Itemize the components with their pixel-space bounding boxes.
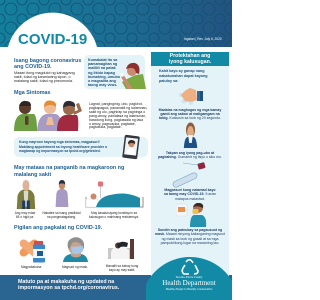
- symptoms text: pagtusuka, pagtatae.: [89, 125, 122, 129]
- intro text: nabakunahan dapat kayong: [159, 74, 208, 78]
- icon: person with mask: [63, 237, 88, 262]
- intro text: Maaari itong magdulot ng kahagyang: [14, 70, 75, 74]
- intro text: [159, 69, 208, 83]
- icon: pregnant woman: [56, 180, 68, 207]
- icon: coughing person: [120, 62, 146, 89]
- callout: contact provider: magbarap ng impormasyon sa tpchd.org/getested.: [19, 149, 101, 153]
- covering cough text: Takpan ang iyong pag-ubo at: [166, 151, 214, 155]
- icon: tablet with doctor: [122, 134, 140, 160]
- icon: person with mask and document: [176, 203, 206, 227]
- footer text: impormasyon sa tpchd.org/coronavirus.: [18, 285, 119, 291]
- intro heading: ang COVID-19.: [14, 64, 51, 70]
- symptoms text: [89, 102, 148, 129]
- panel heading: [151, 52, 229, 66]
- org name large: Health Department: [162, 278, 216, 286]
- label: 65 o higit pa.: [16, 215, 34, 219]
- intro text: sakit, tulad ng karaniwang sipon, o: [14, 75, 71, 79]
- icon: triangle logo: [182, 260, 198, 274]
- symptoms text: o amoy, pagsusuka, pagtatae,: [89, 122, 136, 126]
- symptoms text: pang-amoy, panlalasa ng lalamunan,: [89, 114, 146, 118]
- label: kayo ay may sakit.: [109, 268, 135, 272]
- label: [14, 211, 36, 219]
- hand washing text: [158, 108, 222, 120]
- covering cough text: [158, 151, 222, 159]
- footer text: [18, 278, 119, 291]
- risk group: pregnant: [42, 180, 81, 219]
- callout: cough: [84, 55, 145, 89]
- intro text: patuloy sa:: [159, 79, 178, 83]
- label: [89, 211, 139, 219]
- intro text: malalang sakit, tulad ng pneumonia.: [14, 79, 73, 83]
- isolation text: [155, 228, 225, 245]
- callout: cough: ng likido kapag: [88, 71, 115, 75]
- symptoms text: sakit ng ulo, paghirap sa paghinga o: [89, 110, 145, 114]
- high risk heading: [14, 165, 124, 178]
- callout: cough: Kumakalat ito sa: [88, 58, 117, 62]
- covering cough text: pagbahing. Gumamit ng tisyu o siko mo.: [158, 155, 222, 159]
- label: [106, 264, 138, 272]
- isolation text: mask. Maaari ninyong kailanganing magsuot: [155, 232, 225, 236]
- symptoms text: pagkapagod, pananakit ng kalamnan,: [89, 106, 147, 110]
- risk group: conditions: [86, 182, 144, 219]
- intro text: [14, 70, 75, 83]
- panel: protect your health: [151, 52, 229, 300]
- high risk heading: May mataas na panganib na magkaroon ng: [14, 165, 124, 171]
- callout: cough: pamamagitan ng: [88, 62, 117, 66]
- isolation text: ng mask sa loob ng gusali at sa mga: [162, 237, 218, 241]
- hand washing text: tubig. Kuskusin sa loob ng 20 segundo.: [159, 116, 221, 120]
- callout: cough: o magsalita ang: [88, 79, 116, 83]
- testing text: [164, 188, 216, 201]
- panel heading: iyong kalusugan.: [169, 59, 211, 65]
- header banner: [0, 0, 232, 47]
- callout: cough: bumahing, umubo: [88, 75, 120, 79]
- prevention: mask: [62, 237, 88, 269]
- panel heading: Protektahan ang: [170, 53, 210, 59]
- icon: person in bed: [108, 239, 134, 259]
- icon: bandage and vaccine vial: [20, 240, 45, 262]
- testing text: matapos malantad.: [175, 197, 205, 201]
- icon: elderly man: [16, 180, 36, 209]
- prevention: vaccine: [20, 240, 45, 269]
- isolation text: pampublikong lugar na maraming tao.: [161, 241, 219, 245]
- callout: contact provider: [14, 137, 148, 157]
- callout: contact provider: Kung mayroon kayong mga sintomas, magpasuri!: [19, 140, 100, 144]
- symptoms text: baradong ilong, pagkawala ng lasa: [89, 118, 143, 122]
- label: kalusugan o mahinang resistensya.: [89, 215, 139, 219]
- callout: cough: maliliit na patak: [88, 66, 116, 70]
- label: May kasalukuyang kondisyon sa: [91, 211, 137, 215]
- intro heading: [14, 58, 82, 70]
- prevention heading: Pigilan ang pagkalat ng COVID-19.: [14, 225, 102, 231]
- intro heading: Isang bagong coronavirus: [14, 58, 81, 64]
- footer text: Matuto pa at makakuha ng updated na: [18, 278, 114, 284]
- tagline: Healthy People in Healthy Communities: [166, 286, 212, 290]
- symptoms text: Lagnat, panginginig, ubo, pagkirot,: [89, 102, 143, 106]
- logo block: health department: [146, 257, 232, 300]
- risk group: elderly: [14, 180, 36, 219]
- footer band: [0, 275, 232, 300]
- icon: patient in hospital bed: [86, 182, 144, 208]
- label: Magsuot ng mask.: [62, 264, 88, 268]
- high risk heading: malalang sakit: [14, 172, 51, 178]
- label: Magpabakuna.: [21, 264, 42, 268]
- prevention: stay home: [106, 239, 138, 272]
- label: Ang may edad: [15, 211, 35, 215]
- label: na pangmatagalang.: [47, 215, 76, 219]
- hand washing text: Madalas na maghugas ng mga kamay: [159, 108, 221, 112]
- testing text: sa taong may COVID-19. 5 araw: [164, 192, 216, 196]
- org name small: Tacoma–Pierce County: [175, 275, 202, 279]
- title: COVID-19: [18, 31, 87, 48]
- label: [42, 211, 81, 219]
- isolation text: Sundin ang patnubay sa pagsusuot ng: [158, 228, 222, 232]
- callout: cough: taong may virus.: [88, 83, 117, 87]
- testing text: Magpasuri kung nalantad kayo: [164, 188, 216, 192]
- label: Manatili sa bahay kung: [106, 264, 138, 268]
- illustration: three people with symptoms: [14, 100, 82, 131]
- symptoms heading: Mga Sintomas: [14, 90, 51, 96]
- hand washing text: gamit ang sabon at maligamgam na: [160, 112, 220, 116]
- label: Nakatira sa isang pasilidad: [42, 211, 81, 215]
- callout: contact provider: Mabilang appointment sa inyong healthcare provider o: [19, 145, 107, 149]
- icon: test swab: [172, 162, 206, 188]
- date: Ingatan | Rev. July 6, 2020: [184, 37, 222, 41]
- icon: person covering cough: [184, 122, 198, 148]
- intro text: Kahit kayo ay ganap nang: [159, 69, 204, 73]
- icon: hand washing: [179, 88, 203, 105]
